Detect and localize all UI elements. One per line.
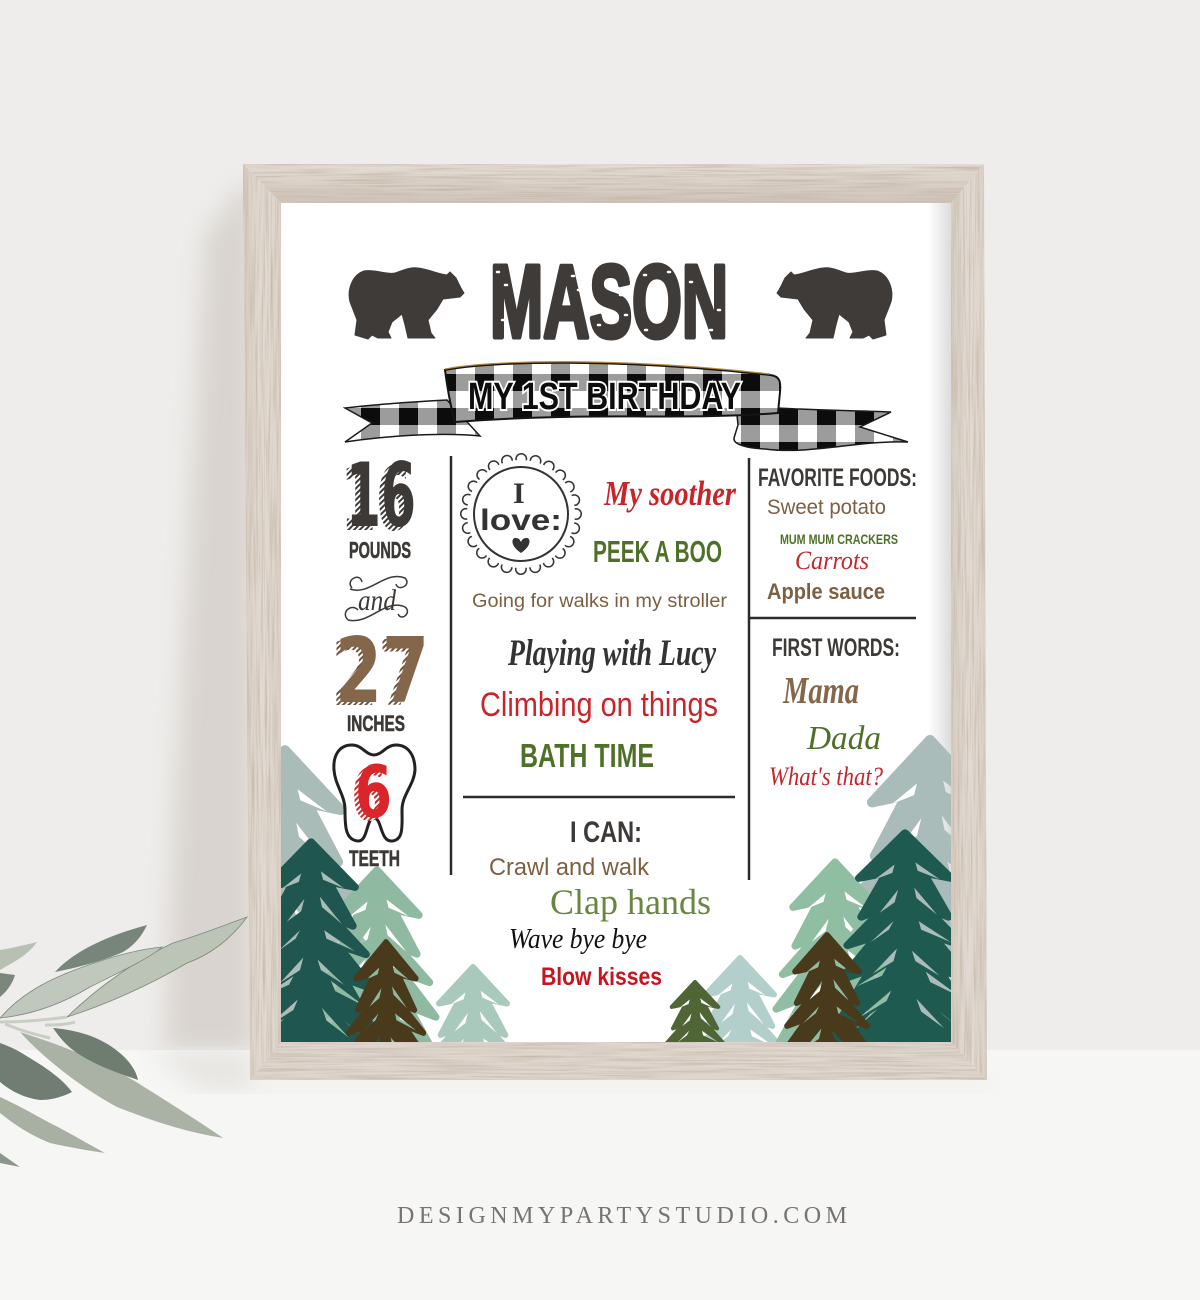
tree: light green left (322, 866, 440, 1042)
picture frame (243, 164, 987, 1080)
leaf: dark left (0, 1043, 72, 1100)
list: I love items: My soother (603, 474, 736, 513)
list: favorite foods: Apple sauce (767, 579, 885, 604)
list: I can: I CAN: (570, 816, 642, 849)
stat: 6 teeth: 6 (355, 750, 392, 834)
leaf: large upper (67, 917, 247, 1017)
stat: 16 pounds: POUNDS (349, 537, 411, 563)
ribbon: centre (445, 363, 780, 422)
ornament: and (345, 576, 407, 621)
list: first words (769, 634, 900, 791)
tree: light green right (772, 858, 888, 1042)
list: I love items: Climbing on things (480, 686, 718, 724)
forest illustration (195, 740, 1023, 1171)
ribbon: left tail (345, 400, 480, 442)
stat: 16 pounds (341, 444, 416, 563)
badge: I love: I (513, 477, 525, 510)
tree: brown right (784, 932, 870, 1042)
watermark: DESIGNMYPARTYSTUDIO.COM (397, 1203, 847, 1229)
tree: pale right (705, 955, 778, 1042)
tree: pale left (436, 964, 510, 1042)
list: I love items: BATH TIME (520, 737, 654, 774)
column dividers (451, 456, 916, 880)
wall shadow behind frame (165, 185, 255, 1052)
icon: right bear (777, 268, 892, 339)
leaf: small dark (0, 973, 15, 997)
title: MASON (490, 244, 728, 359)
stem (0, 1017, 75, 1038)
ornament: and: and (358, 584, 397, 617)
leaf: bottom (0, 1097, 105, 1153)
list: favorite foods: FAVORITE FOODS: (758, 464, 917, 492)
leaf: dark rear (55, 925, 147, 972)
stat: 27 inches: 27 (335, 619, 429, 724)
badge: I love (466, 459, 576, 569)
stat: 6 teeth: TEETH (349, 846, 400, 871)
ribbon banner (345, 362, 908, 450)
list: first words: FIRST WORDS: (772, 634, 900, 662)
stat: 16 pounds: 16 (341, 448, 411, 551)
leaf: small light (0, 942, 37, 970)
leaf: large lower (20, 1032, 223, 1138)
stat: 27 inches: INCHES (347, 711, 405, 736)
ribbon: right tail (734, 405, 908, 450)
list: first words: What's that? (769, 762, 883, 791)
tree: brown left (346, 939, 426, 1042)
list: first words: Mama (782, 670, 859, 712)
tree: dark right (832, 829, 951, 1042)
list: I can: Clap hands (550, 882, 711, 922)
tree: small olive (665, 980, 725, 1042)
banner text: MY 1ST BIRTHDAY (468, 376, 741, 418)
list: I can: Wave bye bye (509, 924, 647, 955)
list: I love items (472, 474, 736, 774)
leaf: tip (0, 1153, 20, 1167)
list: favorite foods: Sweet potato (767, 496, 886, 519)
table surface (0, 1050, 1200, 1300)
stat: 6 teeth: 6 (351, 753, 387, 837)
leaf: dark lower (53, 1028, 138, 1080)
plant leaves (0, 917, 247, 1167)
list: I love items: Going for walks in my stroller (472, 591, 728, 612)
list: I love items: PEEK A BOO (593, 534, 722, 569)
list: first words: Dada (806, 720, 881, 757)
stat: 6 teeth (334, 745, 415, 871)
list: I can: Blow kisses (541, 963, 662, 991)
tree: dark left (281, 838, 381, 1042)
leaf: mid upper (0, 947, 162, 1018)
stat: 16 pounds: 16 (346, 444, 416, 547)
list: I can (489, 816, 711, 991)
list: favorite foods: Carrots (795, 546, 869, 575)
list: I love items: Playing with Lucy (507, 633, 716, 674)
badge: I love: love: (480, 504, 562, 537)
tree: grey back right (851, 734, 951, 1028)
list: favorite foods (758, 464, 917, 604)
list: favorite foods: MUM MUM CRACKERS (780, 531, 898, 547)
poster paper (281, 203, 951, 1042)
frame shadow on table (150, 1050, 990, 1090)
icon: left bear (349, 268, 464, 339)
stat: 27 inches: 27 (331, 622, 425, 727)
tree: grey back left (281, 745, 366, 1034)
title (490, 244, 728, 359)
list: I can: Crawl and walk (489, 854, 650, 881)
